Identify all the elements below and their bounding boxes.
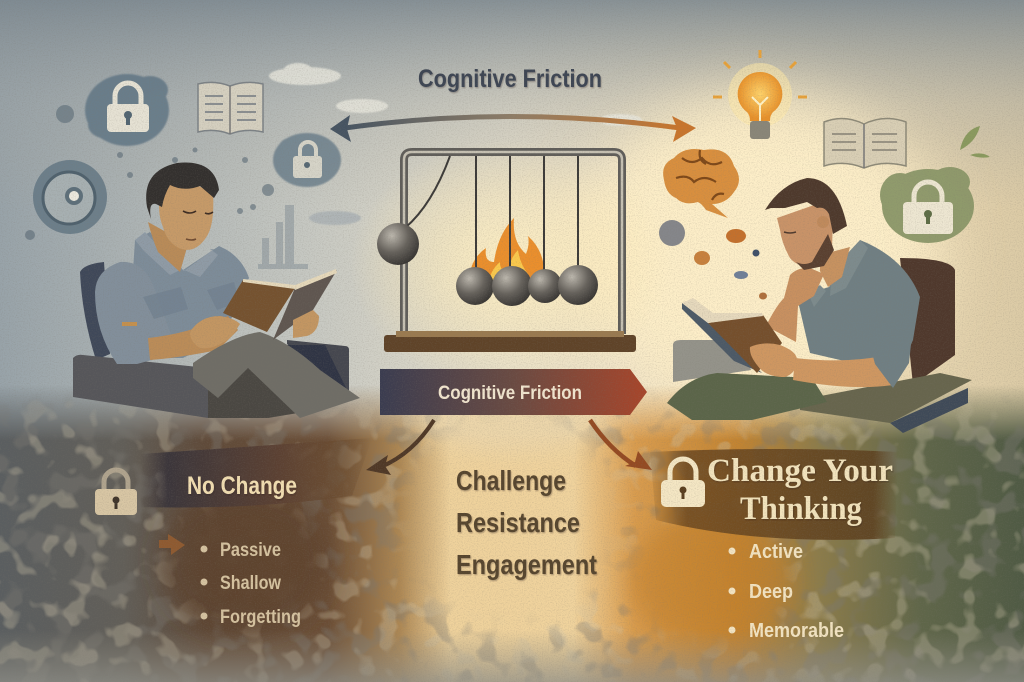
list: change: Memorable <box>749 620 844 642</box>
icon: brain <box>663 149 739 218</box>
right icons <box>659 50 990 300</box>
title: Cognitive Friction <box>418 65 602 93</box>
floating stones <box>659 126 990 300</box>
armchair <box>80 262 110 360</box>
forearm <box>793 355 893 387</box>
decorative dots <box>25 105 274 240</box>
shirt <box>797 240 920 387</box>
heading: change your thinking: Thinking <box>740 491 862 527</box>
center words: Engagement <box>456 549 597 580</box>
heading: change your thinking <box>707 453 893 527</box>
book <box>682 303 762 373</box>
flame <box>469 218 544 290</box>
balls <box>377 223 419 265</box>
chair <box>900 258 955 385</box>
right person <box>667 178 972 433</box>
hands <box>190 316 240 348</box>
book <box>223 280 295 332</box>
center words <box>456 465 597 580</box>
list: no change: Shallow <box>220 573 281 594</box>
list: change: Active <box>749 541 803 563</box>
glow behind cradle <box>350 140 670 390</box>
panel: no change <box>95 438 372 628</box>
icon: lock in green cloud <box>880 167 974 243</box>
icon: open book <box>824 118 906 168</box>
list: no change: Passive <box>220 540 281 561</box>
icon: lock <box>661 459 705 507</box>
arrow left <box>366 420 434 475</box>
icon: lock <box>95 470 137 515</box>
strings <box>476 156 578 270</box>
arrow right <box>590 420 652 470</box>
banner: change <box>650 449 898 540</box>
icon: small lock <box>273 133 341 187</box>
list: no change: Forgetting <box>220 607 301 628</box>
icon: open book <box>198 82 263 134</box>
title arrow <box>330 115 696 142</box>
forearm <box>148 316 238 360</box>
chin arm <box>766 268 824 342</box>
neck <box>820 247 850 287</box>
icon: lock in blue cloud <box>85 74 169 146</box>
heading: change your thinking: Change Your <box>707 453 893 489</box>
hand <box>750 343 797 377</box>
center words: Challenge <box>456 465 566 496</box>
left person <box>73 163 360 418</box>
center banner: Cognitive Friction <box>438 383 582 404</box>
panel: change your thinking <box>650 449 898 642</box>
neck <box>148 222 188 272</box>
left icons <box>25 74 341 269</box>
icon: gear disc <box>33 160 107 234</box>
legs <box>193 332 360 418</box>
icon: light bulb <box>713 50 807 139</box>
heading: no change: No Change <box>187 472 297 500</box>
list: no change <box>200 540 301 628</box>
legs <box>667 373 827 420</box>
shirt <box>128 232 249 358</box>
icon: bar chart <box>258 205 308 269</box>
small arrow <box>159 534 185 555</box>
head <box>777 204 833 265</box>
list: change: Deep <box>749 581 793 603</box>
banner: no change <box>140 438 372 508</box>
head <box>159 179 213 250</box>
list: change <box>728 541 844 642</box>
frame <box>404 152 622 334</box>
center words: Resistance <box>456 507 580 538</box>
center banner <box>380 369 647 415</box>
clouds <box>269 63 642 225</box>
Newton's cradle <box>377 152 636 352</box>
